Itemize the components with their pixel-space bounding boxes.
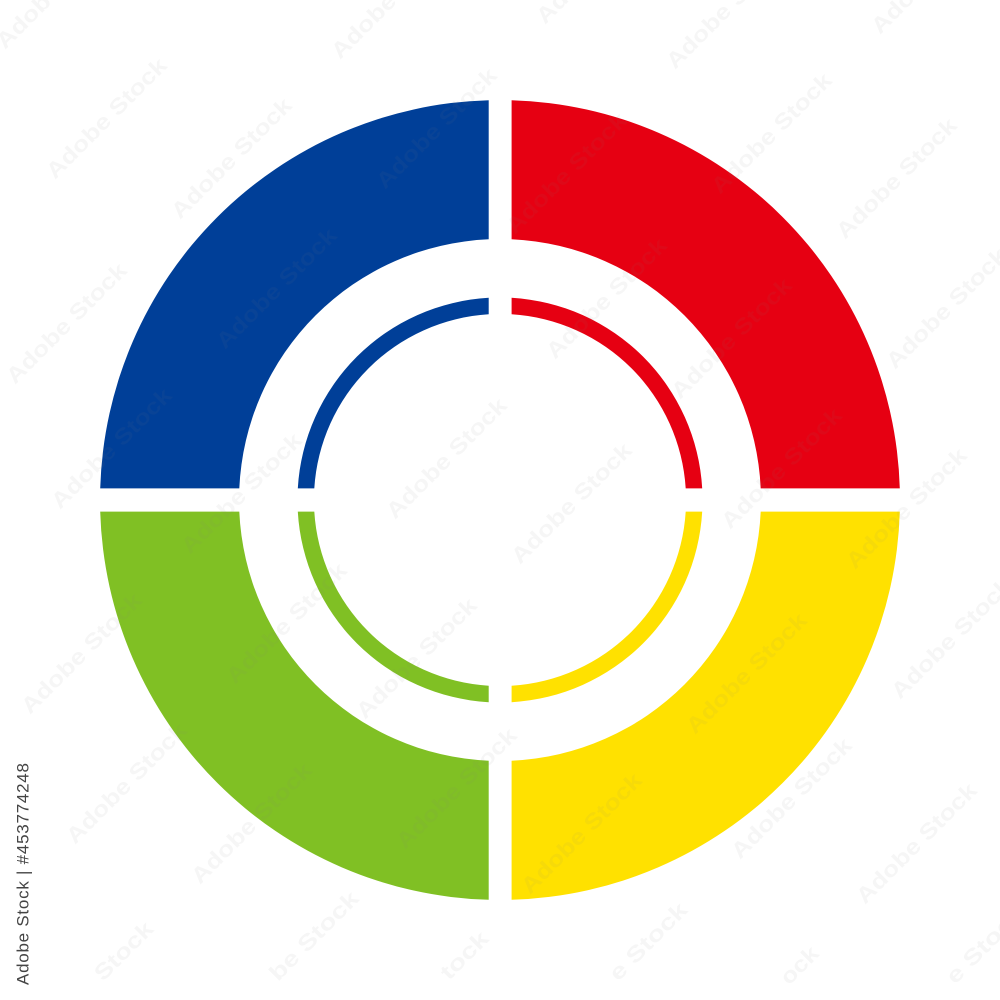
faint diagonal watermark: Stock xyxy=(89,916,159,986)
faint diagonal watermark: Adobe Stock xyxy=(706,67,837,199)
faint diagonal watermark: Adobe Stock xyxy=(841,442,972,574)
faint diagonal watermark: Adobe Stock xyxy=(681,607,812,739)
outer segment: red xyxy=(512,100,900,488)
inner arc: blue xyxy=(298,298,489,488)
faint diagonal watermark: Adobe Stock xyxy=(166,92,297,224)
faint diagonal watermark: Adobe Stock xyxy=(41,52,172,184)
faint diagonal watermark: Adobe Stock xyxy=(351,592,482,724)
faint diagonal watermark: Adobe Stock xyxy=(1,257,132,389)
faint diagonal watermark: Adobe Stock xyxy=(381,392,512,524)
faint diagonal watermark: Adobe Stock xyxy=(176,427,307,559)
inner arc: yellow xyxy=(512,512,702,702)
faint diagonal watermark: Adobe Stock xyxy=(831,112,962,244)
faint diagonal watermark: Adobe Stock xyxy=(886,572,1000,704)
faint diagonal watermark: Adobe Stock xyxy=(541,232,672,364)
outer segment: yellow xyxy=(512,512,900,900)
faint diagonal watermark: ock xyxy=(775,940,824,990)
faint diagonal watermark: e Stock xyxy=(604,896,693,986)
faint diagonal watermark: Adobe Stock xyxy=(881,242,1000,374)
faint diagonal watermark: Adobe Stock xyxy=(46,382,177,514)
faint diagonal watermark: Adobe Stock xyxy=(391,722,522,854)
faint diagonal watermark: Adobe Stock xyxy=(506,437,637,569)
faint diagonal watermark: be Stock xyxy=(264,885,364,986)
faint diagonal watermark: Adobe Stock xyxy=(61,717,192,849)
faint diagonal watermark: tock xyxy=(435,925,494,985)
inner arc: red xyxy=(512,298,702,488)
outer ring segments xyxy=(100,100,900,900)
inner ring segments xyxy=(298,298,702,702)
faint diagonal watermark: Adobe Stock xyxy=(666,272,797,404)
outer segment: green xyxy=(100,512,489,900)
faint diagonal watermark: Adobe Stock xyxy=(516,767,647,899)
faint diagonal watermark: Adobe Stock xyxy=(16,587,147,719)
faint diagonal watermark: Adobe Stock xyxy=(211,222,342,354)
faint diagonal watermark: Adobe Stock xyxy=(851,777,982,909)
faint diagonal watermark: Adobe Stock xyxy=(726,732,857,864)
faint diagonal watermark: Adobe Stock xyxy=(371,62,502,194)
faint diagonal watermark: Adobe Stock xyxy=(501,107,632,239)
outer segment: blue xyxy=(100,100,489,488)
faint diagonal watermark: Adobe Stock xyxy=(186,757,317,889)
faint diagonal watermark: Adobe Stock xyxy=(716,402,847,534)
side credit text: Adobe Stock | #453774248 xyxy=(14,763,32,985)
faint diagonal watermark: Adobe Stock xyxy=(221,557,352,689)
inner arc: green xyxy=(298,512,489,702)
